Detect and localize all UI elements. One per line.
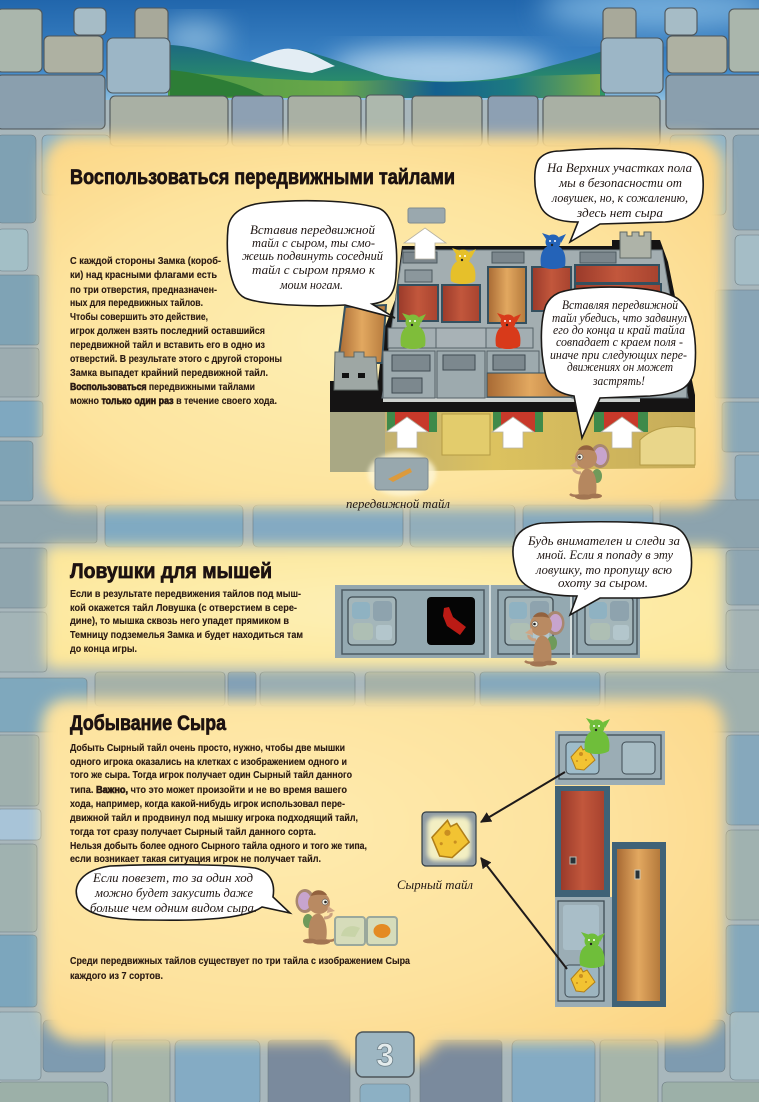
text block: traps rules: кой окажется тайл Ловушка (с отверстием в сере- <box>70 603 297 614</box>
sliding tile ejected above board <box>408 208 445 223</box>
text block: cheese rules: тогда тот сразу получает Сырный тайл данного сорта. <box>70 827 316 838</box>
speech bubble: watch me: Будь внимателен и следи за <box>527 533 680 548</box>
speech bubble: push tile fully: движениях он может <box>567 359 673 374</box>
panel glows <box>42 136 724 1062</box>
red and orange sliding tiles <box>398 285 438 321</box>
box front <box>330 412 695 472</box>
label: cheese tile: Сырный тайл <box>397 877 473 892</box>
text block: moving tiles rules: передвижной тайл и вставить его в одно из <box>70 340 265 351</box>
text block: cheese rules: хода, например, когда какой-нибудь игрок использовал пере- <box>70 798 345 810</box>
cheese tile card <box>422 812 476 866</box>
text block: moving tiles rules: по три отверстия, предназначен- <box>70 285 217 296</box>
heading: mouse traps: Ловушки для мышей <box>70 560 272 583</box>
speech bubble: push tile fully: иначе при следующих пере- <box>550 347 687 362</box>
page number stone: 3 <box>376 1037 394 1073</box>
speech bubble: push tile fully: совпадает с краем поля - <box>556 334 683 349</box>
text block: moving tiles rules <box>70 255 282 407</box>
text block: traps rules: Если в результате передвижения тайлов под мыш- <box>70 589 301 600</box>
speech bubble: upper floor: здесь нет сыра <box>576 205 664 220</box>
trap hole with fallen red piece <box>427 597 475 645</box>
mouse character <box>525 611 564 667</box>
game board illustration <box>330 208 695 496</box>
label: sliding tile: передвижной тайл <box>346 496 450 511</box>
text block: moving tiles rules: Воспользоваться передвижными тайлами <box>70 382 255 393</box>
orange tile <box>612 842 666 1007</box>
speech bubble: upper floor: ловушек, но, к сожалению, <box>551 190 688 205</box>
speech bubble: insert tile: моим ногам. <box>279 277 343 292</box>
speech bubble: insert tile: тайл с сыром, ты смо- <box>252 235 375 250</box>
text block: cheese count note: Среди передвижных тайлов существует по три тайла с изображением Сыра <box>70 955 410 967</box>
mouse character <box>296 889 335 945</box>
text block: moving tiles rules: можно только один раз в течение своего хода. <box>70 396 277 407</box>
tiles diagram <box>481 718 666 1007</box>
text block: cheese rules: Добыть Сырный тайл очень просто, нужно, чтобы две мышки <box>70 742 345 754</box>
panel: getting cheese <box>70 712 666 1007</box>
speech bubble: push tile fully <box>541 287 695 438</box>
speech bubble: watch me: охоту за сыром. <box>558 575 648 590</box>
speech bubble: upper floor: На Верхних участках пола <box>546 160 692 175</box>
speech bubble: push tile fully: тайл убедись, что задвинул <box>552 310 687 325</box>
speech bubble: watch me: ловушку, то пропущу всю <box>535 562 672 577</box>
sky and landscape <box>0 0 759 100</box>
text block: moving tiles rules: ки) над красными флагами есть <box>70 269 217 281</box>
flag: box opening <box>387 412 648 432</box>
speech bubble: watch me: мной. Если я попаду в эту <box>536 547 673 562</box>
tile floor <box>382 250 688 398</box>
speech bubble: push tile fully: его до конца и край тайла <box>553 322 685 337</box>
text block: traps rules: дине), то мышка сквозь него упадет прямиком в <box>70 616 289 627</box>
speech bubble: insert tile <box>227 201 397 318</box>
text block: cheese count note: каждого из 7 сортов. <box>70 971 163 982</box>
arrows: insert tile <box>386 417 643 448</box>
panel: moving tiles <box>70 149 703 511</box>
text block: moving tiles rules: ных для передвижных тайлов. <box>70 298 203 309</box>
sliding tile sample <box>368 452 436 496</box>
text block: cheese rules: типа. Важно, что это может произойти и не во время вашего <box>70 785 347 796</box>
player pieces <box>451 248 476 284</box>
grey tiles <box>388 328 533 348</box>
speech bubble: lucky turn: Если повезет, то за один ход <box>92 870 253 885</box>
speech bubble: push tile fully: застрять! <box>592 373 645 388</box>
page number stone <box>356 1032 414 1077</box>
text block: cheese rules: одного игрока оказались на клетках с изображением одного и <box>70 756 347 768</box>
arrows to cheese tile <box>481 772 567 969</box>
text block: cheese rules: того же сыра. Тогда игрок получает один Сырный тайл данного <box>70 770 352 781</box>
speech bubble: insert tile: Вставив передвижной <box>250 222 375 237</box>
speech bubble: insert tile: жешь подвинуть соседний <box>242 248 383 263</box>
speech bubble: insert tile: тайл с сыром прямо к <box>252 262 376 277</box>
text block: cheese rules: движной тайл и продвинул под мышку игрока подходящий тайл, <box>70 813 358 824</box>
speech bubble: watch me <box>513 522 692 615</box>
speech bubble: lucky turn: больше чем одним видом сыра. <box>90 900 257 915</box>
text block: cheese count note <box>70 955 410 982</box>
speech bubble: lucky turn: можно будет закусить даже <box>94 885 253 900</box>
heading: getting cheese: Добывание Сыра <box>70 712 226 735</box>
green mouse pieces <box>580 718 610 968</box>
speech bubble: lucky turn <box>76 865 290 920</box>
heading: moving tiles: Воспользоваться передвижными тайлами <box>70 166 455 189</box>
text block: traps rules: до конца игры. <box>70 644 137 655</box>
text block: moving tiles rules: С каждой стороны Замка (короб- <box>70 255 221 267</box>
stones: battlements and top wall <box>0 8 759 146</box>
text block: moving tiles rules: Чтобы совершить это действие, <box>70 311 208 323</box>
text block: cheese rules <box>70 742 367 865</box>
text block: moving tiles rules: отверстий. В результате этого с другой стороны <box>70 354 282 365</box>
text block: cheese rules: если возникает такая ситуация игрок не получает тайл. <box>70 854 321 865</box>
towers <box>620 232 651 258</box>
mouse character <box>570 444 610 500</box>
text block: traps rules: Темницу подземелья Замка и будет находиться там <box>70 629 303 641</box>
speech bubble: upper floor <box>535 149 703 242</box>
speech bubble: push tile fully: Вставляя передвижной <box>562 297 678 312</box>
panel: mouse traps <box>70 522 692 667</box>
arrow up: tile ejected <box>404 228 446 259</box>
text block: cheese rules: Нельзя добыть более одного Сырного тайла одного и того же типа, <box>70 840 367 852</box>
text block: moving tiles rules: игрок должен взять последний оставшийся <box>70 326 265 337</box>
text block: traps rules <box>70 589 303 655</box>
trap tiles strip <box>335 585 640 658</box>
back row cells <box>403 252 437 263</box>
cheese tile icons <box>335 917 397 945</box>
black tray <box>330 240 695 412</box>
speech bubble: upper floor: мы в безопасности от <box>558 175 682 190</box>
top grey tile with cheese <box>555 731 665 785</box>
lower grey tile with cheese <box>555 897 612 1007</box>
red tile <box>555 786 610 897</box>
text block: moving tiles rules: Замка выпадет крайний передвижной тайл. <box>70 368 268 379</box>
